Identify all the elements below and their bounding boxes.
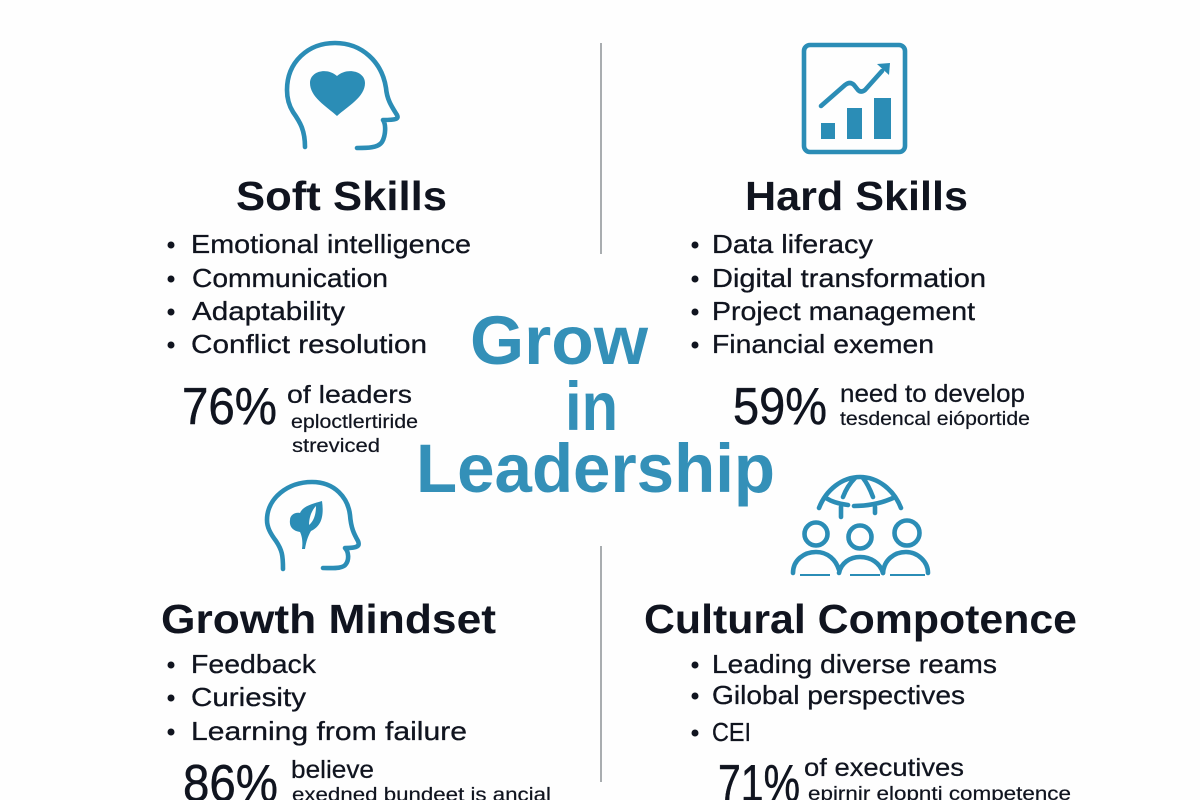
bullet list: hard skills: Data liferacy bbox=[712, 229, 873, 259]
bullet list: growth mindset: Curiesity bbox=[191, 682, 306, 712]
bullet list: hard skills bbox=[692, 229, 986, 359]
stat: 76%: eploctlertiride bbox=[291, 412, 418, 433]
heading: hard skills: Hard Skills bbox=[745, 173, 968, 219]
stat: 76%: 76% bbox=[182, 378, 277, 436]
stat: 59%: 59% bbox=[733, 378, 827, 436]
bullet list: growth mindset bbox=[168, 649, 467, 746]
icon: head with heart bbox=[287, 43, 398, 148]
bullet list: growth mindset: Learning from failure bbox=[191, 716, 467, 746]
bullet list: soft skills: Adaptability bbox=[192, 296, 345, 326]
bullet list: soft skills: Conflict resolution bbox=[191, 329, 427, 359]
panel: hard skills bbox=[692, 45, 1030, 436]
icon: chart in frame bbox=[804, 45, 905, 152]
icon: globe over three people bbox=[793, 477, 928, 575]
stat: 86%: believe bbox=[291, 756, 374, 784]
stat: 76% bbox=[182, 378, 418, 457]
stat: 59%: tesdencal eióportide bbox=[840, 409, 1030, 430]
stat: 76%: of leaders bbox=[287, 381, 412, 409]
title: grow in leadership: Grow bbox=[470, 302, 648, 379]
bullet list: hard skills: Digital transformation bbox=[712, 263, 986, 293]
bullet list: hard skills: Project management bbox=[712, 296, 976, 326]
stat: 71% bbox=[718, 754, 1071, 800]
icon: head with leaf bbox=[267, 482, 359, 569]
heading: growth mindset: Growth Mindset bbox=[161, 596, 496, 642]
panel: growth mindset bbox=[161, 482, 551, 800]
bullet list: soft skills bbox=[168, 229, 471, 359]
stat: 59% bbox=[733, 378, 1030, 436]
bullet list: cultural competence: Gilobal perspectives bbox=[712, 680, 965, 710]
bullet list: growth mindset: Feedback bbox=[191, 649, 317, 679]
heading: soft skills: Soft Skills bbox=[236, 173, 447, 219]
bullet list: cultural competence: Leading diverse reams bbox=[712, 649, 997, 679]
bullet list: cultural competence: CEI bbox=[712, 717, 751, 747]
title: grow in leadership bbox=[416, 302, 775, 507]
stat: 76%: streviced bbox=[292, 436, 380, 457]
stat: 71%: of executives bbox=[804, 754, 964, 782]
bullet list: soft skills: Communication bbox=[192, 263, 388, 293]
bullet list: soft skills: Emotional intelligence bbox=[191, 229, 471, 259]
stat: 59%: need to develop bbox=[840, 380, 1025, 408]
panel: cultural competence bbox=[644, 477, 1077, 800]
title: grow in leadership: Leadership bbox=[416, 430, 775, 507]
bullet list: hard skills: Financial exemen bbox=[712, 329, 934, 359]
title: grow in leadership: in bbox=[565, 368, 618, 445]
heading: cultural competence: Cultural Compotence bbox=[644, 596, 1077, 642]
bullet list: cultural competence bbox=[692, 649, 997, 747]
panel: soft skills bbox=[168, 43, 471, 457]
stat: 86% bbox=[183, 755, 551, 800]
